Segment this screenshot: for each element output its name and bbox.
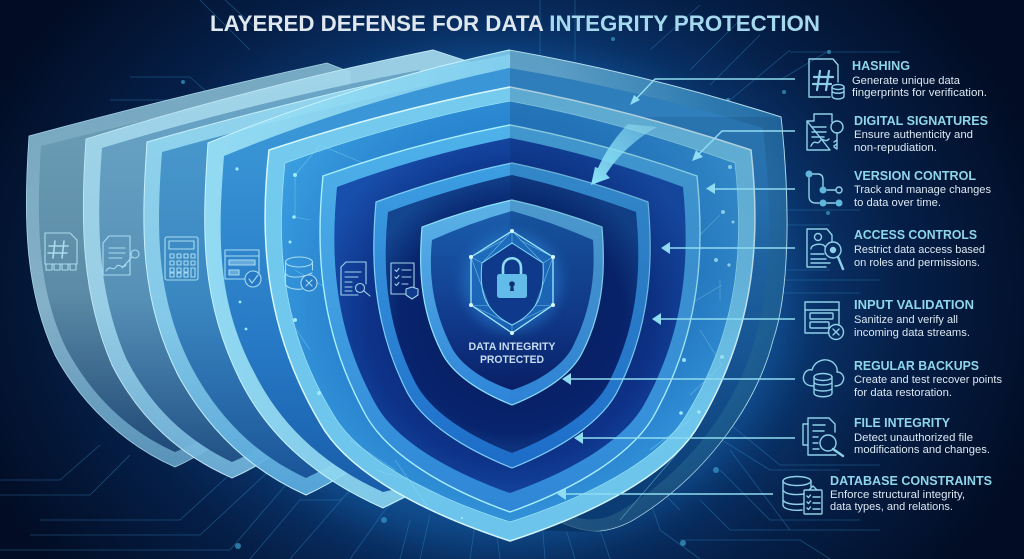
layer 2 shield: signatures	[83, 50, 470, 478]
legend item: input validation	[805, 297, 974, 340]
layer 1 shield: hashing	[26, 63, 350, 467]
icon: documents with magnifier	[803, 418, 843, 456]
arrow: hashing	[630, 79, 795, 105]
legend item: access controls: Restrict data access based	[854, 244, 985, 256]
icon: profile with magnifier	[807, 229, 843, 269]
core label: DATA INTEGRITY	[468, 341, 556, 353]
legend item: access controls: on roles and permissions.	[854, 257, 980, 269]
legend item: input validation: Sanitize and verify all	[854, 314, 958, 326]
layer 3 shield: checksums	[144, 55, 510, 495]
core label: PROTECTED	[480, 354, 544, 366]
title: LAYERED DEFENSE FOR DATA INTEGRITY PROTECTION	[210, 11, 820, 36]
layer 4 sparks	[235, 167, 296, 330]
icon: padlock	[497, 258, 527, 298]
legend item: file integrity: FILE INTEGRITY	[854, 415, 950, 430]
arrow: file integrity	[574, 432, 795, 444]
icon: browser with cross	[805, 302, 844, 340]
legend item: regular backups: Create and test recover points	[854, 374, 1002, 386]
icon: signed document with key	[103, 236, 139, 275]
icon: hash file	[809, 59, 844, 99]
arrow: database constraints	[557, 488, 773, 500]
icon: cloud database	[803, 360, 844, 397]
arrow: curved sweep	[591, 124, 657, 185]
icon: branching graph	[806, 170, 842, 206]
icon: calculator	[165, 237, 198, 280]
legend item: file integrity	[803, 415, 990, 456]
network lines	[290, 145, 722, 520]
legend item: digital signatures: DIGITAL SIGNATURES	[854, 113, 988, 128]
network nodes	[288, 141, 734, 519]
legend item: hashing	[809, 58, 987, 99]
legend item: database constraints: data types, and relations.	[830, 501, 953, 513]
layer 6 shield	[320, 125, 700, 512]
circuit nodes	[181, 37, 831, 549]
legend item: access controls: ACCESS CONTROLS	[854, 227, 977, 242]
arrow: input validation	[652, 313, 795, 325]
legend item: version control: to data over time.	[854, 197, 941, 209]
shield glow	[210, 55, 790, 545]
arrow: digital signatures	[692, 131, 795, 161]
legend item: digital signatures: non-repudiation.	[854, 142, 937, 154]
legend item: input validation: incoming data streams.	[854, 327, 970, 339]
icon: hash document	[45, 233, 77, 270]
right half shading	[510, 50, 787, 382]
legend item: digital signatures	[807, 113, 988, 154]
legend item: database constraints: Enforce structural integrity,	[830, 489, 965, 501]
layer 7 shield	[374, 163, 650, 468]
legend item: input validation: INPUT VALIDATION	[854, 297, 974, 312]
icon: database with clipboard	[783, 476, 822, 514]
arrow: regular backups	[562, 373, 795, 385]
legend item: digital signatures: Ensure authenticity and	[854, 129, 973, 141]
legend item: regular backups: for data restoration.	[854, 387, 952, 399]
legend item: access controls	[807, 227, 985, 269]
arrow: version control	[706, 183, 795, 194]
icon: browser form	[225, 250, 261, 287]
legend item: regular backups: REGULAR BACKUPS	[854, 358, 979, 373]
legend item: version control: Track and manage changes	[854, 184, 992, 196]
legend item: hashing: Generate unique data	[852, 75, 961, 87]
icon: checklist shield	[391, 263, 418, 299]
layer 5 shield: main	[265, 87, 755, 541]
legend item: hashing: fingerprints for verification.	[852, 87, 987, 99]
legend item: version control	[806, 168, 992, 209]
layer 4 shield: outer translucent	[205, 50, 787, 532]
legend item: regular backups	[803, 358, 1002, 399]
core emblem: hexagon and padlock	[462, 229, 562, 335]
legend item: version control: VERSION CONTROL	[854, 168, 976, 183]
layer 8 core shield	[421, 200, 603, 405]
legend item: file integrity: modifications and changes.	[854, 444, 990, 456]
icon: signed file and key	[807, 114, 843, 150]
arrow: access controls	[661, 242, 795, 254]
legend item: file integrity: Detect unauthorized file	[854, 432, 973, 444]
legend item: database constraints: DATABASE CONSTRAINTS	[830, 473, 992, 488]
icon: file search	[341, 262, 370, 296]
legend item: hashing: HASHING	[852, 58, 910, 73]
icon: database error	[286, 257, 317, 291]
core label	[468, 341, 556, 366]
legend item: database constraints	[783, 473, 992, 514]
